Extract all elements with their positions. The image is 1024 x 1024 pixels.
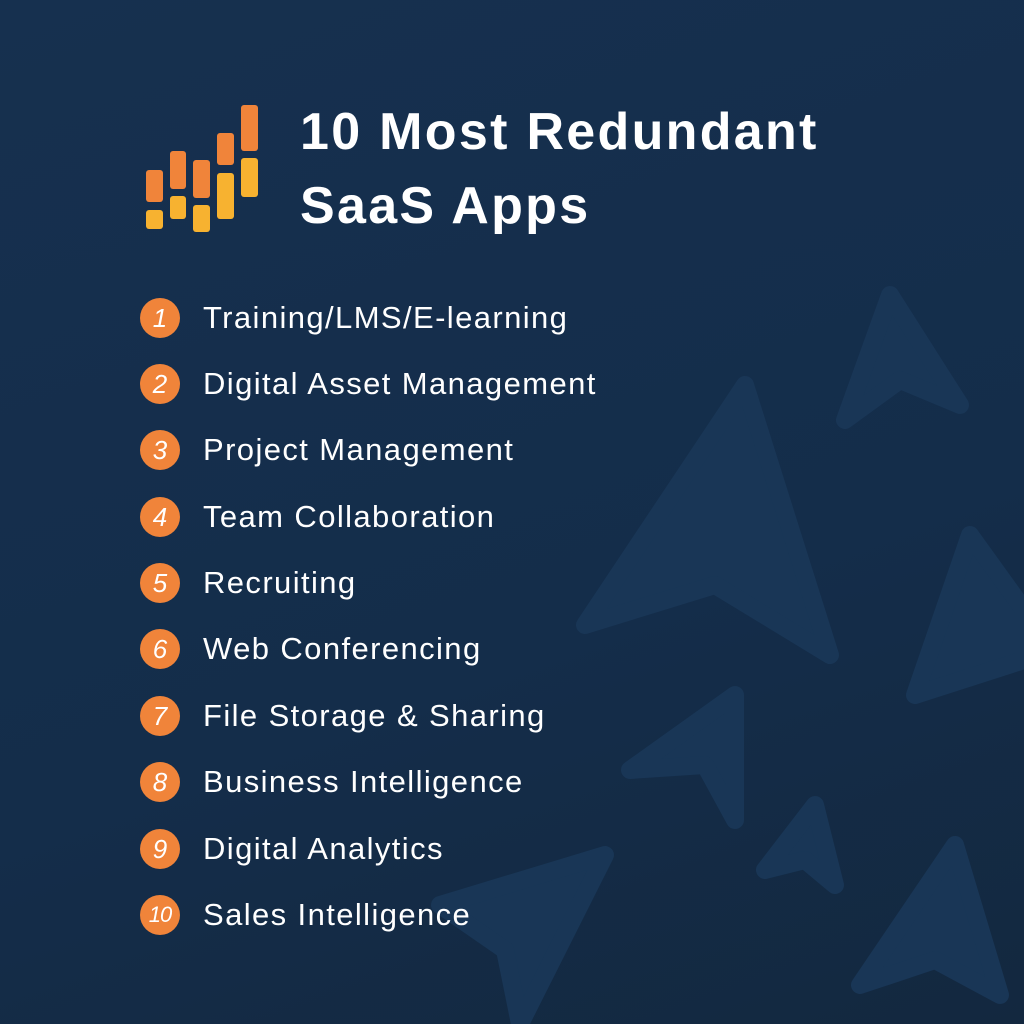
list: 1 [153, 303, 167, 333]
list: 10 [149, 902, 171, 927]
list [140, 298, 597, 935]
title: SaaS Apps [300, 177, 590, 235]
title [300, 103, 819, 235]
title: 10 Most Redundant [300, 103, 819, 161]
list: 7 [153, 701, 167, 731]
list: Project Management [203, 432, 514, 467]
logo [146, 105, 258, 232]
list: 6 [153, 634, 167, 664]
list: 9 [153, 834, 167, 864]
list: Sales Intelligence [203, 897, 471, 932]
list: Digital Asset Management [203, 366, 597, 401]
list: 5 [153, 568, 167, 598]
list: Business Intelligence [203, 764, 524, 799]
list: Recruiting [203, 565, 357, 600]
list: Digital Analytics [203, 831, 444, 866]
list: Team Collaboration [203, 499, 495, 534]
list: 2 [153, 369, 167, 399]
list: 8 [153, 767, 167, 797]
list: Training/LMS/E-learning [203, 300, 568, 335]
list: 3 [153, 435, 167, 465]
list: File Storage & Sharing [203, 698, 546, 733]
list: 4 [153, 502, 167, 532]
list: Web Conferencing [203, 631, 482, 666]
